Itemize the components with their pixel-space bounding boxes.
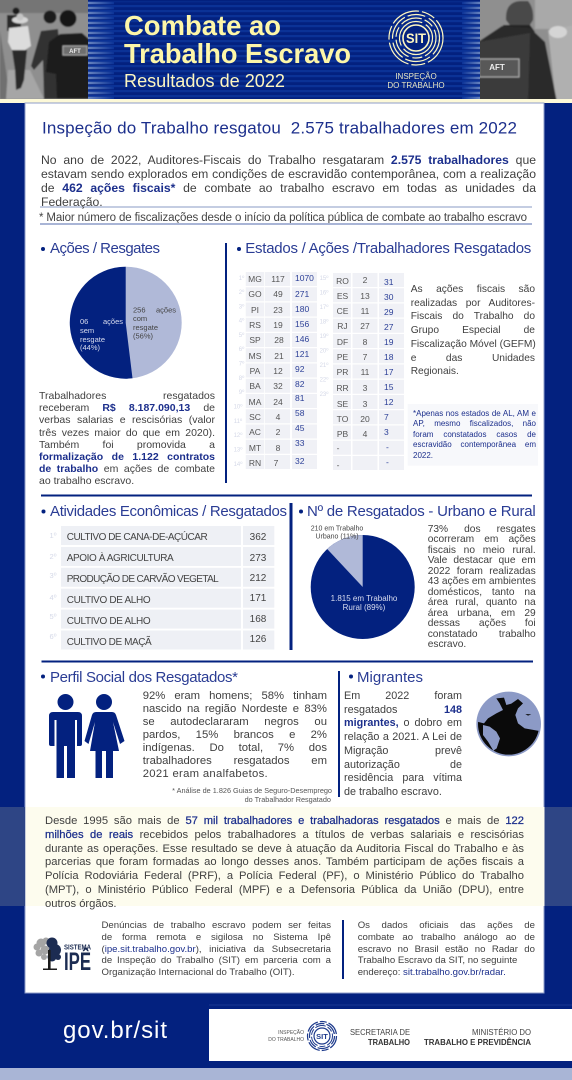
text: verbas recebidas: Também foi promovida a bbox=[39, 439, 215, 451]
table: states ranking left: 92 bbox=[295, 364, 305, 374]
text: histórico desde 1995: milhões de reais recebidos pelos trabalhadores a títulos de verbas salariais e rescisórias bbox=[45, 829, 524, 841]
table: states ranking left: 12 bbox=[273, 366, 283, 376]
heading: Ações / Resgates: Ações / Resgates bbox=[50, 240, 160, 257]
table: states ranking right: 18º bbox=[320, 318, 329, 326]
table: states ranking left: 1070 bbox=[295, 273, 314, 283]
footer url: gov.br/sit bbox=[63, 1017, 167, 1044]
table: states ranking right: 11 bbox=[361, 367, 370, 377]
table: states ranking right: - bbox=[337, 443, 340, 453]
text: migrantes: resgatados 148 bbox=[344, 704, 462, 716]
text: perfil social: pardos, 15% brancos e 2% bbox=[143, 729, 327, 741]
table: economic activities: 4º bbox=[50, 593, 57, 602]
table: states ranking left: 19 bbox=[273, 320, 283, 330]
text: ações fiscais: Regionais. bbox=[411, 366, 459, 377]
table: states ranking right: 31 bbox=[384, 277, 394, 287]
text: urbano e rural: escravo. bbox=[428, 639, 466, 650]
table: states ranking left: 11º bbox=[234, 418, 243, 425]
pie chart: urbano rural bbox=[311, 526, 415, 639]
table: states ranking left: 6º bbox=[239, 346, 245, 353]
table: states ranking left: 2º bbox=[239, 289, 245, 296]
text: dados oficiais: Os dados oficiais das ações de bbox=[358, 920, 535, 931]
table: states ranking left: 82 bbox=[295, 379, 305, 389]
table: states ranking left: 32 bbox=[273, 381, 283, 391]
text: urbano e rural: fiscais no meio rural. bbox=[428, 545, 536, 556]
table: states ranking left: 10º bbox=[234, 404, 243, 410]
headline: Trabalho Escravo bbox=[124, 38, 351, 69]
intro paragraph bbox=[41, 153, 536, 209]
heading: Migrantes: Migrantes bbox=[357, 669, 423, 686]
text: histórico desde 1995: Polícia Rodoviária Federal (PRF), a Polícia Federal (PF), o Ministério Público do Trabalho bbox=[45, 870, 524, 882]
text: migrantes: residência para vítima bbox=[344, 772, 462, 784]
table: states ranking right: 3 bbox=[363, 399, 368, 409]
table: states ranking left: 1º bbox=[239, 275, 245, 282]
pie chart: ações: resgate bbox=[80, 335, 105, 344]
headline bbox=[124, 10, 351, 69]
pie chart: ações: com bbox=[133, 314, 147, 323]
table: economic activities: APOIO À AGRICULTURA bbox=[67, 551, 174, 564]
table: economic activities: PRODUÇÃO DE CARVÃO VEGETAL bbox=[67, 572, 219, 585]
footnote: record: * Maior número de fiscalizações desde o início da política pública de combate ao trabalho escravo bbox=[39, 212, 527, 224]
table: states ranking right: DF bbox=[337, 337, 348, 347]
text: migrantes: de trabalho escravo. bbox=[344, 786, 442, 798]
pie chart: urbano rural: 1.815 em Trabalho bbox=[331, 594, 398, 603]
table: states ranking right: 11 bbox=[361, 306, 370, 316]
text: perfil social: 2021 eram analfabetos. bbox=[143, 768, 268, 780]
intro paragraph: Federação. bbox=[41, 195, 103, 209]
pie chart: ações: 06 bbox=[80, 317, 88, 326]
table: states ranking right: 21º bbox=[320, 362, 329, 369]
text: perfil social bbox=[142, 690, 327, 780]
text: migrantes: relação a 2021. A Lei de bbox=[344, 731, 462, 743]
table: states ranking left: 7º bbox=[239, 360, 245, 368]
intro paragraph: de 462 ações fiscais* de combate ao trabalho escravo em todas as unidades da bbox=[41, 181, 536, 195]
note box background bbox=[408, 404, 538, 466]
table: states ranking right: 4 bbox=[363, 429, 368, 439]
table: states ranking left: 180 bbox=[295, 304, 309, 314]
text: perfil social: nascido na região Nordeste e 83% bbox=[143, 703, 327, 715]
text: urbano e rural: 73% dos resgates bbox=[428, 524, 536, 535]
table: states ranking left: 5º bbox=[239, 332, 245, 339]
table: states ranking right: PR bbox=[337, 367, 348, 377]
table: economic activities: 362 bbox=[250, 532, 267, 543]
table: states ranking left: 45 bbox=[295, 423, 305, 433]
table: states ranking right: 20 bbox=[360, 414, 370, 424]
text: migrantes: Migração prevê bbox=[344, 745, 462, 757]
text: ações fiscais: Fiscais do Trabalho do bbox=[411, 311, 535, 322]
table: states ranking left: 2 bbox=[276, 427, 281, 437]
text: ações fiscais: realizadas por Auditores- bbox=[411, 298, 535, 309]
text: dados oficiais: endereço: sit.trabalho.gov.br/radar. bbox=[358, 967, 506, 978]
text: migrantes: migrantes, o dobro em bbox=[344, 717, 462, 729]
table: states ranking right: CE bbox=[337, 306, 349, 316]
pie chart: ações: (56%) bbox=[133, 332, 154, 340]
table: states ranking left: AC bbox=[249, 427, 261, 437]
table: states ranking left: MT bbox=[249, 443, 261, 453]
text: urbano e rural bbox=[428, 524, 536, 650]
table: economic activities: 212 bbox=[250, 573, 267, 584]
table: states ranking left: 13º bbox=[234, 446, 243, 454]
pie chart: ações: sem bbox=[80, 326, 94, 335]
table: states ranking left: 156 bbox=[295, 319, 309, 329]
text: ações fiscais: Fiscalização Móvel (GEFM) bbox=[411, 339, 536, 350]
table: states ranking right: 23º bbox=[320, 391, 329, 398]
text: migrantes: autorização de bbox=[344, 759, 462, 771]
white content panel bbox=[25, 103, 544, 993]
text: dados oficiais: Trabalho Escravo da SIT, no seguinte bbox=[358, 955, 517, 966]
text: urbano e rural: ocorreram em ações bbox=[428, 534, 536, 545]
text: verbas recebidas: Trabalhadores resgatados bbox=[39, 390, 215, 402]
text: perfil social: indígenas. Do total, 7% dos bbox=[143, 742, 327, 754]
footer logo strip: SIT bbox=[316, 1032, 328, 1041]
text: verbas recebidas: receberam R$ 8.187.090,13 de bbox=[39, 402, 215, 414]
text: perfil social: trabalhadores resgatados em bbox=[143, 755, 327, 767]
text: urbano e rural: dessas ações foi bbox=[428, 618, 536, 629]
text: verbas recebidas: formalização de 1.122 contratos bbox=[39, 451, 215, 463]
text: histórico desde 1995: outros órgãos. bbox=[45, 898, 117, 910]
logo: Sistema Ipê: IPÊ bbox=[64, 946, 91, 976]
table: states ranking right: TO bbox=[337, 414, 349, 424]
table: economic activities: CULTIVO DE CANA-DE-AÇÚCAR bbox=[67, 530, 208, 543]
text: histórico desde 1995: Desde 1995 são mais de 57 mil trabalhadores e trabalhadoras resgatados e mais de 122 bbox=[45, 815, 524, 827]
table: economic activities: 1º bbox=[50, 531, 57, 540]
table: states ranking right: 2 bbox=[363, 275, 368, 285]
table: economic activities bbox=[50, 526, 274, 650]
table: states ranking left: 146 bbox=[295, 334, 309, 344]
table: states ranking left: MA bbox=[249, 397, 262, 407]
table: states ranking left: PI bbox=[251, 305, 259, 315]
table: states ranking right: RR bbox=[336, 383, 349, 393]
table: states ranking right: 7 bbox=[363, 352, 368, 362]
text: dados oficiais: combate ao trabalho análogo ao de bbox=[358, 932, 535, 943]
photo: workers walking bbox=[0, 0, 93, 102]
main title: Inspeção do Trabalho resgatou 2.575 trabalhadores em 2022 bbox=[42, 118, 517, 138]
text: urbano e rural: 43 ações em ambientes bbox=[428, 576, 536, 587]
headline: Combate ao bbox=[124, 10, 281, 41]
pie chart: ações: 256 bbox=[133, 306, 146, 314]
pie chart: ações: ações bbox=[103, 317, 123, 326]
text: denúncias: Organização Internacional do Trabalho (OIT). bbox=[102, 967, 295, 978]
photo: auditor with AFT vest bbox=[477, 0, 572, 102]
table: economic activities: 6º bbox=[50, 632, 57, 641]
text: dados oficiais bbox=[358, 920, 535, 978]
table: states ranking right: 27 bbox=[360, 321, 370, 331]
table: states ranking right: 3 bbox=[363, 383, 368, 393]
table: states ranking left: 117 bbox=[271, 274, 285, 284]
text: verbas recebidas: ao trabalho escravo. bbox=[39, 475, 134, 487]
text: denúncias: de forma remota e sigilosa no Sistema Ipê bbox=[102, 932, 331, 943]
table: states ranking left: 24 bbox=[273, 397, 283, 407]
text: urbano e rural: Vale destacar que em bbox=[428, 555, 536, 566]
table: states ranking right: 20º bbox=[320, 348, 329, 354]
table: states ranking left: 4 bbox=[276, 412, 281, 422]
table: states ranking right: 8 bbox=[363, 337, 368, 347]
text: histórico desde 1995: parcerias que foram formadas ao longo desses anos. Também participam de ações fiscais a bbox=[45, 856, 524, 868]
table: states ranking left: PA bbox=[250, 366, 261, 376]
footer logo strip: SECRETARIA DE bbox=[350, 1028, 410, 1037]
table: states ranking left: 14º bbox=[234, 461, 243, 468]
pie chart: ações bbox=[70, 267, 182, 379]
logo: Sistema Ipê bbox=[34, 938, 91, 976]
text: ações fiscais: e das Unidades bbox=[411, 353, 535, 364]
table: states ranking right: 27 bbox=[384, 322, 394, 332]
icon: globe bbox=[475, 692, 541, 760]
table: states ranking right: - bbox=[386, 442, 389, 452]
table: states ranking right: 17º bbox=[320, 304, 329, 311]
table: states ranking left: 4º bbox=[239, 318, 245, 324]
note: states without cases: AP, mesmo fiscalizados, não bbox=[413, 419, 536, 428]
text: denúncias bbox=[102, 920, 331, 978]
table: states ranking right: RO bbox=[336, 276, 349, 286]
table: states ranking right: 29 bbox=[384, 307, 394, 317]
heading: Urbano e Rural: Nº de Resgatados - Urbano e Rural bbox=[307, 503, 536, 520]
table: states ranking left: 21 bbox=[274, 351, 284, 361]
table: states ranking left: 81 bbox=[295, 393, 305, 403]
footer logo strip bbox=[209, 1005, 572, 1061]
text: migrantes bbox=[344, 690, 462, 798]
table: states ranking left: BA bbox=[249, 381, 261, 391]
table: states ranking left: MS bbox=[249, 351, 262, 361]
table: states ranking left: 49 bbox=[273, 289, 283, 299]
pie chart: ações: resgate bbox=[133, 323, 158, 332]
table: states ranking left: 7 bbox=[274, 458, 279, 468]
table: states ranking left: 58 bbox=[295, 408, 305, 418]
footer logo strip: TRABALHO bbox=[368, 1038, 410, 1047]
footnote: guias bbox=[172, 786, 332, 804]
text: verbas recebidas: de trabalho em ações de combate bbox=[39, 463, 215, 475]
logo: SIT: INSPEÇÃO bbox=[395, 72, 437, 81]
pie chart: urbano rural: 210 em Trabalho bbox=[311, 526, 363, 532]
note: states without cases: *Apenas nos estados de AL, AM e bbox=[413, 409, 536, 418]
text: denúncias: (ipe.sit.trabalho.gov.br), iniciativa da Subsecretaria bbox=[102, 944, 331, 955]
text: perfil social: se autodeclararam negros ou bbox=[143, 716, 327, 728]
table: states ranking right: 19º bbox=[320, 333, 329, 340]
text: verbas recebidas: verbas salarias e rescisórias (valor bbox=[39, 414, 215, 426]
text: verbas recebidas: três vezes maior do que em 2020). bbox=[39, 427, 215, 439]
header banner bbox=[0, 0, 572, 103]
photo: auditor with AFT vest: AFT bbox=[489, 63, 505, 72]
table: states ranking left: 121 bbox=[295, 349, 309, 359]
logo: SIT bbox=[387, 11, 445, 90]
text: urbano e rural: domésticos, tanto na bbox=[428, 587, 536, 598]
table: states ranking left: 8 bbox=[276, 443, 281, 453]
table: states ranking right: 22º bbox=[320, 376, 329, 384]
table: states ranking right: - bbox=[337, 460, 340, 470]
pie chart: urbano rural: Rural (89%) bbox=[343, 603, 386, 612]
logo: SIT: SIT bbox=[406, 30, 426, 46]
pie chart: ações: (44%) bbox=[80, 343, 101, 352]
footnote: guias: do Trabalhador Resgatado bbox=[245, 795, 331, 804]
table: states ranking left: MG bbox=[248, 274, 262, 284]
table: economic activities: 168 bbox=[250, 614, 267, 625]
pie chart: urbano rural: Urbano (11%) bbox=[315, 534, 359, 540]
table: economic activities: CULTIVO DE MAÇÃ bbox=[67, 635, 152, 648]
text: perfil social: 92% eram homens; 58% tinham bbox=[143, 690, 327, 702]
table: economic activities: 2º bbox=[50, 552, 57, 561]
text: ações fiscais: As ações fiscais são bbox=[411, 284, 535, 295]
table: economic activities: 273 bbox=[250, 553, 267, 564]
table: states ranking right: 7 bbox=[384, 412, 389, 422]
table: states ranking right: 17 bbox=[384, 367, 394, 377]
intro paragraph: estavam sendo explorados em condições de escravidão contemporânea, com a realização bbox=[41, 167, 536, 181]
table: states ranking left: SP bbox=[249, 335, 261, 345]
text: denúncias: Denúncias de trabalho escravo podem ser feitas bbox=[102, 920, 331, 931]
text: denúncias: de Inspeção do Trabalho (SIT) em parceria com a bbox=[102, 955, 331, 966]
subtitle: Resultados de 2022 bbox=[124, 71, 285, 91]
note: states without cases: 2022. bbox=[413, 451, 433, 460]
table: states ranking right: 19 bbox=[384, 337, 394, 347]
table: states ranking right bbox=[320, 273, 394, 470]
table: economic activities: 126 bbox=[250, 634, 267, 645]
heading: Perfil Social: Perfil Social dos Resgatados* bbox=[50, 669, 238, 686]
table: states ranking left: GO bbox=[248, 289, 262, 299]
table: states ranking left: SC bbox=[249, 412, 261, 422]
table: states ranking left: 33 bbox=[295, 438, 305, 448]
text: ações fiscais bbox=[410, 284, 536, 377]
logo: SIT: DO TRABALHO bbox=[387, 81, 445, 90]
logo: Sistema Ipê: SISTEMA bbox=[64, 944, 91, 952]
table: states ranking right: PE bbox=[337, 352, 348, 362]
table: economic activities: 5º bbox=[50, 612, 57, 621]
text: migrantes: Em 2022 foram bbox=[344, 690, 462, 702]
text: dados oficiais: escravo no Brasil estão no Radar do bbox=[358, 944, 535, 955]
table: states ranking right: 12 bbox=[384, 397, 394, 407]
table: states ranking left: 28 bbox=[274, 335, 284, 345]
table: states ranking right: ES bbox=[337, 291, 348, 301]
text: urbano e rural: área urbana, em 29 bbox=[428, 608, 536, 619]
table: economic activities: 171 bbox=[250, 593, 267, 604]
table: economic activities: CULTIVO DE ALHO bbox=[67, 595, 151, 606]
table: states ranking left: RN bbox=[249, 458, 261, 468]
bottom strip bbox=[0, 1068, 572, 1080]
table: states ranking right: 15º bbox=[320, 275, 329, 282]
table: economic activities: 3º bbox=[50, 571, 57, 580]
text: histórico desde 1995 bbox=[45, 815, 524, 910]
table: states ranking left: 32 bbox=[295, 456, 305, 466]
text: ações fiscais: Grupo Especial de bbox=[411, 325, 535, 336]
table: states ranking left: 3º bbox=[239, 304, 245, 310]
footer logo strip: DO TRABALHO bbox=[268, 1037, 304, 1043]
footnote: guias: * Análise de 1.826 Guias de Seguro-Desemprego bbox=[172, 786, 332, 795]
text: urbano e rural: área rural, quanto na bbox=[428, 597, 536, 608]
table: states ranking left: 23 bbox=[273, 305, 283, 315]
table: states ranking right: 16º bbox=[320, 290, 329, 296]
table: states ranking right: - bbox=[386, 457, 389, 467]
intro paragraph: No ano de 2022, Auditores-Fiscais do Trabalho resgataram 2.575 trabalhadores que bbox=[41, 153, 536, 167]
table: states ranking left: 271 bbox=[295, 289, 309, 299]
table: states ranking right: 3 bbox=[384, 427, 389, 437]
table: states ranking left: 8º bbox=[239, 375, 245, 382]
highlighted band bbox=[0, 807, 572, 906]
heading: Estados: Estados / Ações /Trabalhadores Resgatados bbox=[245, 240, 531, 257]
note: states without cases bbox=[413, 409, 536, 460]
text: histórico desde 1995: (MPT), o Ministério Público Federal (MPF) e a Defensoria Pública da União (DPU), entre bbox=[45, 884, 524, 896]
table: states ranking right: PB bbox=[337, 429, 348, 439]
table: states ranking right: 30 bbox=[384, 292, 394, 302]
note: states without cases: foram constatados casos de bbox=[413, 430, 536, 439]
footer logo strip: INSPEÇÃO bbox=[278, 1029, 304, 1036]
table: states ranking right: 15 bbox=[384, 382, 394, 392]
pie chart: ações: ações bbox=[156, 306, 176, 314]
photo: workers walking: AFT bbox=[69, 49, 81, 55]
footer logo strip: TRABALHO E PREVIDÊNCIA bbox=[424, 1038, 531, 1047]
icon: man and woman bbox=[49, 694, 124, 778]
footer logo strip: MINISTÉRIO DO bbox=[472, 1028, 531, 1037]
table: states ranking right: 18 bbox=[384, 352, 394, 362]
text: histórico desde 1995: durante as operações. Esse resultado se deve à atuação da Auditoria Fiscal do Trabalho e às bbox=[45, 843, 524, 855]
table: states ranking right: 13 bbox=[360, 291, 370, 301]
table: economic activities: CULTIVO DE ALHO bbox=[67, 616, 151, 627]
table: states ranking right: SE bbox=[337, 399, 348, 409]
table: states ranking left bbox=[234, 272, 314, 469]
heading: Atividades Econômicas: Atividades Econômicas / Resgatados bbox=[50, 503, 287, 520]
text: urbano e rural: constatado trabalho bbox=[428, 629, 536, 640]
text: verbas recebidas bbox=[39, 390, 215, 487]
table: states ranking left: RS bbox=[249, 320, 261, 330]
table: states ranking left: 9º bbox=[239, 389, 245, 396]
table: states ranking left: 12º bbox=[234, 432, 243, 439]
text: urbano e rural: 2022 foram realizadas bbox=[428, 566, 536, 577]
note: states without cases: escravidão contemporânea em bbox=[413, 440, 536, 449]
table: states ranking right: RJ bbox=[337, 321, 348, 331]
